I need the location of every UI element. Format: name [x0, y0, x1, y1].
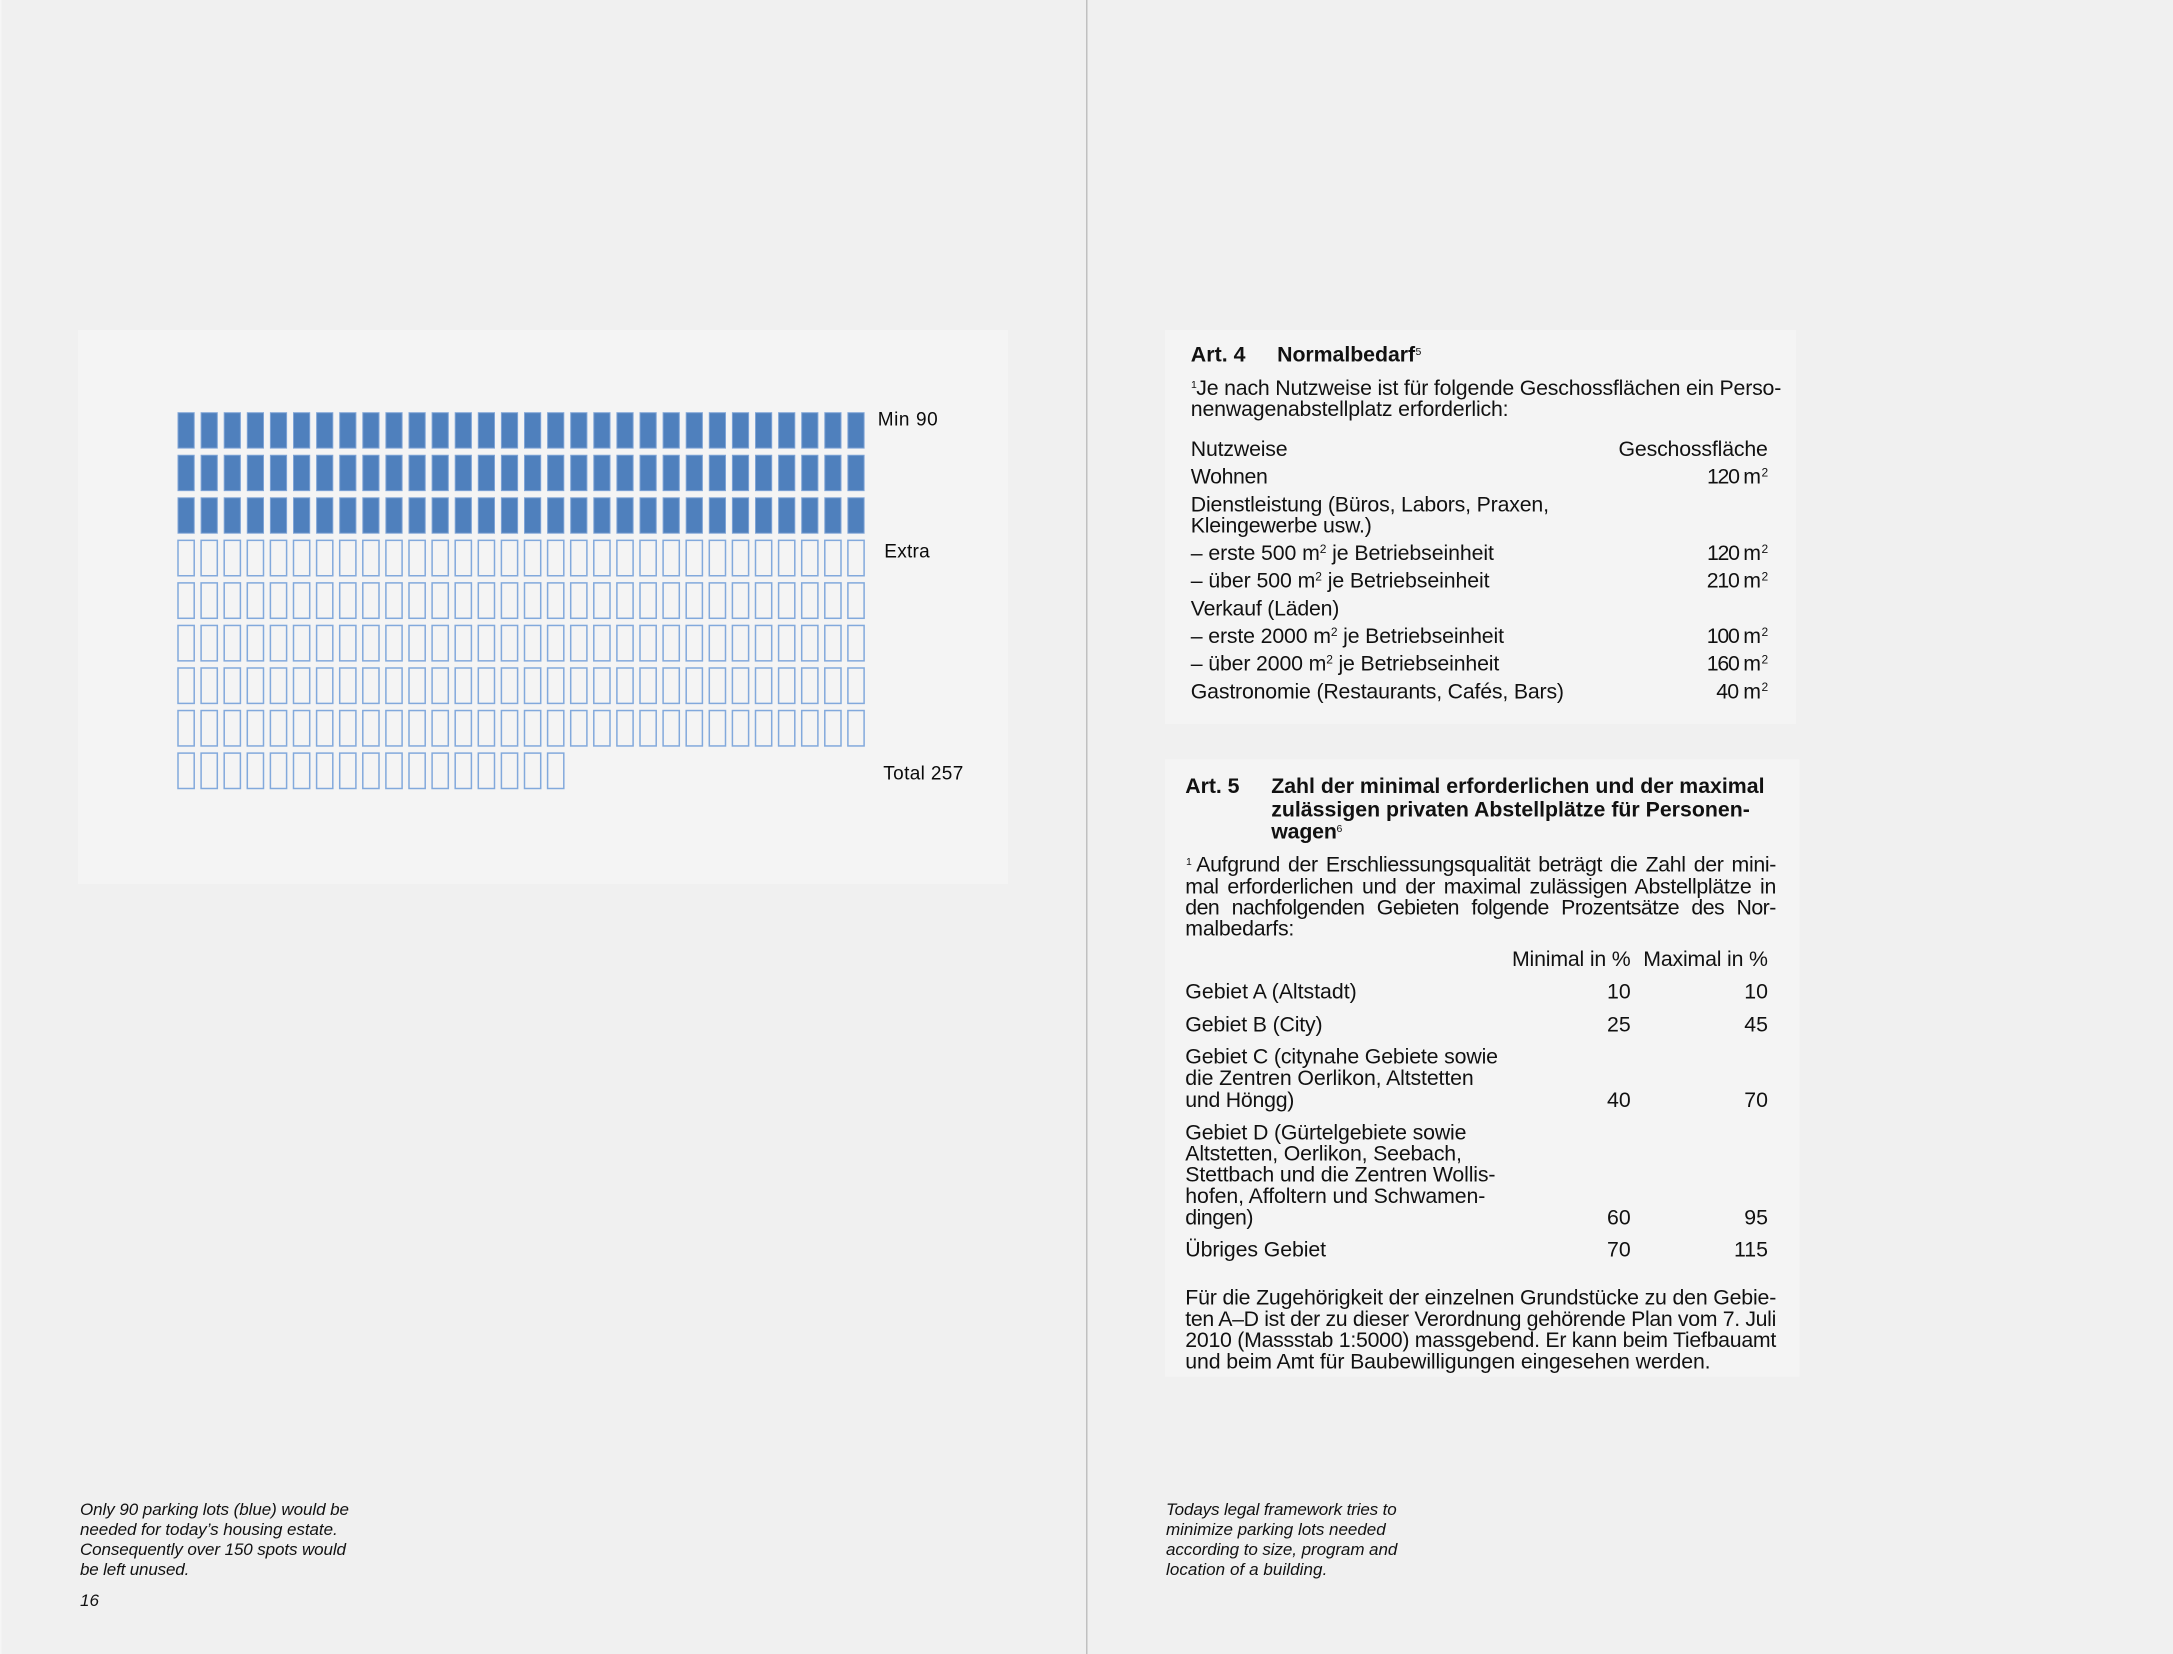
table: percentages per area: 115	[1734, 1237, 1768, 1261]
caption: right page: location of a building.	[1166, 1560, 1327, 1579]
table: floor area per use: Gastronomie (Restaurants, Cafés, Bars)	[1191, 679, 1564, 703]
table: percentages per area: Gebiet B (City)	[1185, 1012, 1323, 1036]
panel: article 4	[1165, 330, 1796, 724]
table: floor area per use: 2	[1762, 652, 1768, 666]
text block: closing paragraph	[1185, 1286, 1776, 1373]
table: percentages per area: Übriges Gebiet	[1185, 1237, 1326, 1261]
text block: introduction: Aufgrund der Erschliessungsqualität beträgt die Zahl der mini-	[1196, 853, 1776, 877]
table: floor area per use: 2	[1326, 653, 1333, 667]
table: floor area per use: Verkauf (Läden)	[1191, 596, 1339, 620]
text block: closing paragraph: Für die Zugehörigkeit der einzelnen Grundstücke zu den Gebie-	[1185, 1286, 1776, 1310]
table: percentages per area: Minimal in %	[1512, 947, 1631, 971]
table: floor area per use: je Betriebseinheit	[1322, 569, 1490, 593]
table: floor area per use: Wohnen	[1191, 465, 1268, 489]
table: percentages per area: Gebiet C (citynahe Gebiete sowie	[1185, 1045, 1498, 1069]
table: percentages per area: Maximal in %	[1643, 947, 1768, 971]
text block: introduction: Je nach Nutzweise ist für folgende Geschossflächen ein Perso-	[1196, 376, 1781, 400]
heading: art. 4: 5	[1416, 346, 1422, 358]
table: floor area per use: – über 2000 m	[1191, 652, 1326, 676]
table: percentages per area: 10	[1607, 980, 1631, 1004]
table: floor area per use: – erste 2000 m	[1191, 624, 1331, 648]
table: percentages per area: dingen)	[1185, 1205, 1254, 1229]
heading: art. 5	[1185, 774, 1764, 844]
table: floor area per use: 2	[1320, 542, 1327, 556]
caption: left page: Consequently over 150 spots would	[80, 1540, 347, 1559]
table: percentages per area: 40	[1607, 1088, 1631, 1112]
panel: article 5	[1165, 759, 1799, 1377]
heading: art. 5: wagen	[1270, 820, 1337, 844]
caption: right page	[1166, 1500, 1398, 1579]
table: percentages per area: 10	[1744, 980, 1768, 1004]
table: floor area per use: 100 m	[1707, 624, 1761, 648]
heading: art. 4: Art. 4	[1191, 343, 1246, 367]
table: floor area per use: Dienstleistung (Büros, Labors, Praxen,	[1191, 492, 1549, 516]
caption: right page: minimize parking lots needed	[1166, 1520, 1386, 1539]
text block: introduction: 1	[1191, 379, 1197, 391]
panel: parking lot chart	[78, 330, 1008, 884]
table: floor area per use: Geschossfläche	[1618, 437, 1768, 461]
heading: art. 5: Zahl der minimal erforderlichen und der maximal	[1271, 774, 1764, 798]
heading: art. 5: zulässigen privaten Abstellplätze für Personen-	[1271, 797, 1750, 821]
table: floor area per use: 120 m	[1707, 465, 1761, 489]
table: floor area per use: 160 m	[1707, 652, 1761, 676]
table: floor area per use	[1191, 437, 1768, 703]
text block: introduction	[1191, 376, 1781, 421]
caption: left page: Only 90 parking lots (blue) would be	[80, 1500, 349, 1519]
table: floor area per use: je Betriebseinheit	[1326, 541, 1494, 565]
text block: introduction	[1185, 853, 1776, 941]
table: floor area per use: je Betriebseinheit	[1333, 652, 1499, 676]
table: percentages per area: Altstetten, Oerlikon, Seebach,	[1185, 1141, 1462, 1165]
table: percentages per area: Stettbach und die Zentren Wollis-	[1185, 1163, 1496, 1187]
text block: introduction: den nachfolgenden Gebieten folgende Prozentsätze des Nor-	[1185, 895, 1776, 919]
text block: closing paragraph: ten A–D ist der zu dieser Verordnung gehörende Plan vom 7. Juli	[1185, 1307, 1776, 1331]
table: floor area per use: 2	[1762, 542, 1768, 556]
text block: introduction: mal erforderlichen und der maximal zulässigen Abstellplätze in	[1185, 874, 1776, 898]
table: percentages per area	[1185, 947, 1768, 1261]
table: floor area per use: 2	[1315, 570, 1322, 584]
caption: left page: needed for today’s housing estate.	[80, 1520, 338, 1539]
table: percentages per area: 60	[1607, 1205, 1631, 1229]
table: floor area per use: – über 500 m	[1191, 569, 1315, 593]
table: floor area per use: Kleingewerbe usw.)	[1191, 514, 1372, 538]
page number: 16	[80, 1591, 99, 1610]
label: extra: Extra	[884, 542, 930, 563]
table: percentages per area: 70	[1607, 1237, 1631, 1261]
table: floor area per use: je Betriebseinheit	[1337, 624, 1504, 648]
table: floor area per use: Nutzweise	[1191, 437, 1288, 461]
table: percentages per area: 95	[1744, 1205, 1768, 1229]
text block: closing paragraph: 2010 (Massstab 1:5000) massgebend. Er kann beim Tiefbauamt	[1185, 1328, 1776, 1352]
caption: left page: be left unused.	[80, 1560, 189, 1579]
table: percentages per area: und Höngg)	[1185, 1088, 1294, 1112]
table: floor area per use: – erste 500 m	[1191, 541, 1320, 565]
caption: right page: according to size, program and	[1166, 1540, 1398, 1559]
table: percentages per area: 25	[1607, 1012, 1631, 1036]
table: percentages per area: 45	[1744, 1012, 1768, 1036]
label: total 257: Total 257	[883, 764, 963, 785]
table: floor area per use: 2	[1762, 570, 1768, 584]
table: percentages per area: die Zentren Oerlikon, Altstetten	[1185, 1066, 1474, 1090]
text block: introduction: 1	[1186, 856, 1192, 868]
table: percentages per area: hofen, Affoltern und Schwamen-	[1185, 1184, 1485, 1208]
table: floor area per use: 210 m	[1707, 569, 1761, 593]
table: floor area per use: 2	[1762, 680, 1768, 694]
heading: art. 4: Normalbedarf	[1277, 343, 1416, 367]
table: percentages per area: Gebiet A (Altstadt)	[1185, 980, 1357, 1004]
table: floor area per use: 120 m	[1707, 541, 1761, 565]
text block: introduction: nenwagenabstellplatz erforderlich:	[1191, 397, 1509, 421]
table: floor area per use: 40 m	[1716, 679, 1761, 703]
chart: outlined extra parking lots	[178, 540, 864, 789]
table: floor area per use: 2	[1331, 625, 1338, 639]
table: percentages per area: Gebiet D (Gürtelgebiete sowie	[1185, 1120, 1466, 1144]
table: floor area per use: 2	[1762, 466, 1768, 480]
table: floor area per use: 2	[1762, 625, 1768, 639]
table: percentages per area: 70	[1744, 1088, 1768, 1112]
heading: art. 5: 6	[1336, 823, 1342, 835]
label: min 90: Min 90	[878, 410, 938, 431]
caption: left page	[80, 1500, 349, 1579]
chart: filled blue parking lots, minimum 90	[178, 413, 864, 533]
text block: closing paragraph: und beim Amt für Baubewilligungen eingesehen werden.	[1185, 1349, 1711, 1373]
heading: art. 5: Art. 5	[1185, 774, 1240, 798]
caption: right page: Todays legal framework tries to	[1166, 1500, 1397, 1519]
heading: art. 4	[1191, 343, 1422, 367]
text block: introduction: malbedarfs:	[1185, 917, 1294, 941]
